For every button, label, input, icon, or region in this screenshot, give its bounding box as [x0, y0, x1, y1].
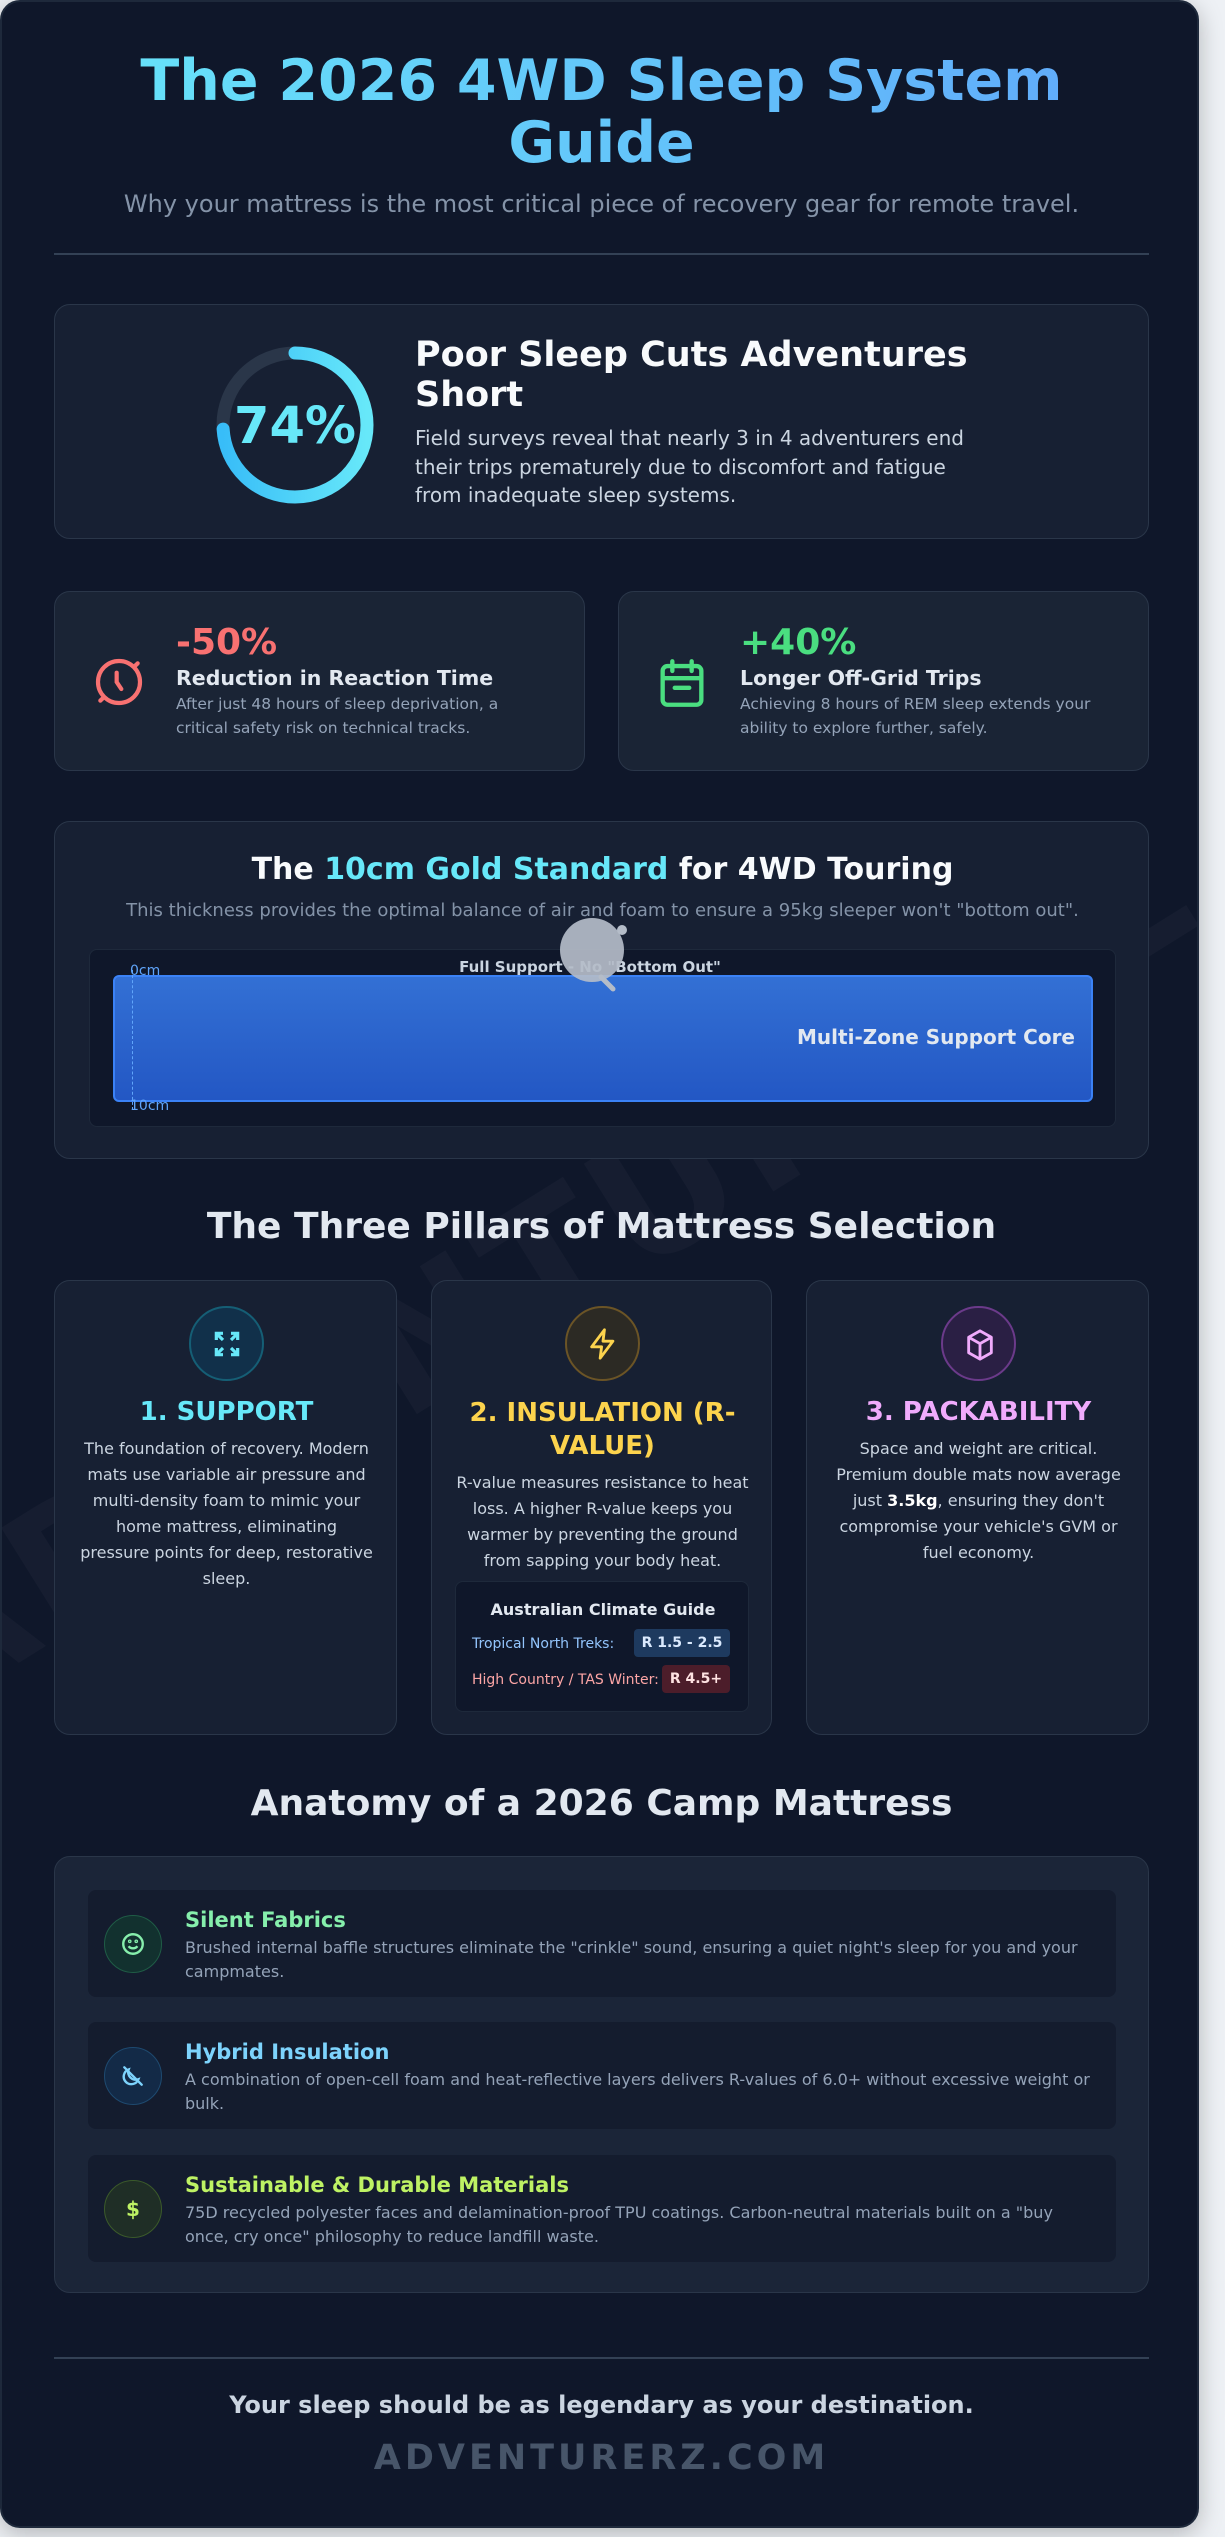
item: sustainable materials: $ — [126, 2197, 140, 2221]
hero heading: Poor Sleep Cuts Adventures Short — [415, 335, 968, 415]
footer brand: ADVENTURERZ.COM — [374, 2438, 829, 2478]
pillar: support — [54, 1280, 397, 1735]
stat card: +40%: Achieving 8 hours of REM sleep extends your ability to explore further, safely. — [740, 695, 1090, 737]
pillar: support: The foundation of recovery. Modern mats use variable air pressure and multi-density foam to mimic your home mattress, eliminating pressure points for deep, restorative sleep. — [80, 1439, 373, 1588]
item: sustainable materials — [88, 2155, 1116, 2262]
icon: sleeper — [560, 918, 627, 992]
icon: bolt — [565, 1306, 640, 1381]
stat card: -50%: Reduction in Reaction Time — [176, 666, 493, 690]
subtitle: Why your mattress is the most critical piece of recovery gear for remote travel. — [124, 190, 1079, 218]
item: hybrid insulation: Hybrid Insulation — [185, 2040, 389, 2064]
icon: box — [941, 1306, 1016, 1381]
bar: support core — [113, 975, 1093, 1102]
pillar: packability: Space and weight are critical. Premium double mats now average just 3.5kg, ensuring they don't compromise your vehicle's GVM or fuel economy. — [836, 1439, 1121, 1562]
item: silent fabrics: Brushed internal baffle structures eliminate the "crinkle" sound, ensuring a quiet night's sleep for you and your campmates. — [185, 1938, 1078, 1981]
mattress diagram: 10cm — [130, 1098, 169, 1114]
title: Guide — [508, 110, 695, 176]
pillar: insulation: 2. INSULATION (R-VALUE) — [470, 1398, 735, 1461]
pillar: support: 1. SUPPORT — [140, 1397, 313, 1427]
subtext: This thickness provides the optimal balance of air and foam to ensure a 95kg sleeper won't "bottom out". — [126, 900, 1079, 921]
pillar: insulation — [431, 1280, 772, 1735]
stat card: +40%: +40% — [740, 622, 856, 663]
title — [2, 50, 1201, 174]
heading: three pillars: The Three Pillars of Mattress Selection — [207, 1206, 996, 1247]
item: hybrid insulation: A combination of open-cell foam and heat-reflective layers delivers R-values of 6.0+ without excessive weight or bulk. — [185, 2070, 1090, 2113]
item: hybrid insulation — [88, 2022, 1116, 2129]
panel: 10cm gold standard — [54, 821, 1149, 1159]
climate guide: R 4.5+ — [670, 1671, 722, 1687]
panel: anatomy — [54, 1856, 1149, 2293]
climate guide: High Country / TAS Winter: — [472, 1672, 659, 1688]
climate guide: Tropical North Treks: — [472, 1636, 614, 1652]
item: silent fabrics: Silent Fabrics — [185, 1908, 346, 1932]
item: sustainable materials: 75D recycled polyester faces and delamination-proof TPU coatings. Carbon-neutral materials built on a "buy once, cry once" philosophy to reduce landfill waste. — [185, 2203, 1053, 2246]
stat card: -50%: -50% — [176, 622, 277, 663]
item: sustainable materials: Sustainable & Durable Materials — [185, 2173, 569, 2197]
stat card: -50%: After just 48 hours of sleep deprivation, a critical safety risk on technical tracks. — [176, 695, 498, 737]
ring chart 74% — [216, 346, 374, 504]
bar: support core: Multi-Zone Support Core — [797, 1025, 1075, 1049]
icon: clock — [96, 658, 142, 706]
heading: The 10cm Gold Standard for 4WD Touring — [252, 852, 953, 887]
item: silent fabrics — [88, 1890, 1116, 1997]
pillar: packability — [806, 1280, 1149, 1735]
mattress diagram — [89, 949, 1116, 1127]
climate guide: R 1.5 - 2.5 — [642, 1635, 722, 1651]
climate guide: Australian Climate Guide — [491, 1600, 715, 1619]
icon: calendar — [660, 659, 704, 707]
hero card — [54, 304, 1149, 539]
mattress diagram: 0cm — [130, 963, 160, 979]
ring chart 74%: 74% — [234, 397, 356, 456]
footer tagline: Your sleep should be as legendary as your destination. — [229, 2391, 974, 2419]
stat card: +40%: Longer Off-Grid Trips — [740, 666, 982, 690]
title: The 2026 4WD Sleep System — [140, 48, 1063, 114]
heading: anatomy: Anatomy of a 2026 Camp Mattress — [251, 1783, 952, 1824]
stat card: -50% — [54, 591, 585, 771]
hero text: Field surveys reveal that nearly 3 in 4 adventurers end their trips prematurely due to discomfort and fatigue from inadequate sleep systems. — [415, 426, 964, 507]
icon: expand — [189, 1306, 264, 1381]
pillar: insulation: R-value measures resistance to heat loss. A higher R-value keeps you warmer by preventing the ground from sapping your body heat. — [456, 1473, 749, 1570]
climate guide — [455, 1581, 749, 1712]
stat card: +40% — [618, 591, 1149, 771]
label: full support: Full Support - No "Bottom Out" — [459, 958, 721, 976]
pillar: packability: 3. PACKABILITY — [866, 1397, 1091, 1427]
